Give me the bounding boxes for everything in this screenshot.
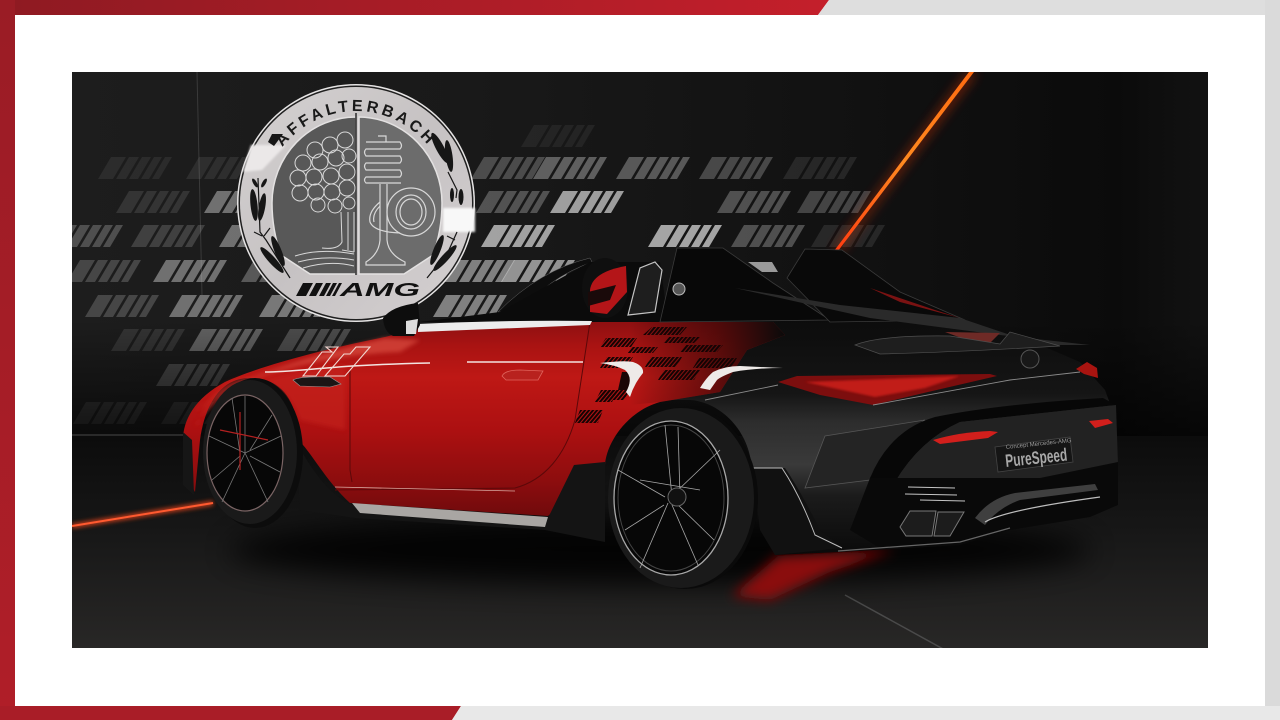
trunk lid highlight	[855, 332, 1060, 354]
star logo	[1021, 350, 1039, 368]
wall stripe graphics	[49, 125, 885, 424]
floor shadow under car	[230, 516, 1090, 584]
emblem disc	[237, 84, 475, 322]
roll hoop left	[660, 248, 830, 322]
laurel right	[427, 131, 464, 278]
plate small text: Concept Mercedes-AMG	[1006, 438, 1072, 451]
side vent badge	[293, 377, 341, 387]
floor lines	[72, 503, 945, 650]
rear wheel	[608, 407, 758, 589]
AMG logo: AMG	[338, 280, 420, 300]
car: rear black body	[674, 362, 1109, 555]
front wheel	[203, 378, 303, 528]
seat gap white	[748, 262, 778, 272]
wall floor junction	[72, 434, 183, 436]
front fascia dark edge	[183, 432, 194, 495]
photo: car in showroom	[72, 72, 1208, 648]
wall panel seams	[197, 72, 202, 295]
wing mirror	[383, 303, 420, 336]
car: red body	[183, 322, 785, 516]
showroom wall	[72, 72, 1208, 452]
laurel left	[249, 134, 290, 278]
character line	[265, 362, 583, 372]
windscreen frame	[498, 258, 592, 312]
seat	[628, 262, 662, 315]
helmet	[582, 258, 628, 318]
rear spokes	[618, 425, 720, 568]
medallion on hoop	[673, 283, 685, 295]
ring glare	[243, 145, 475, 232]
white chrome strip	[418, 321, 592, 332]
rear tyre	[612, 407, 758, 589]
bright hood highlight	[222, 335, 418, 394]
rear aero flick	[754, 468, 806, 554]
AMG emblem	[237, 84, 477, 322]
frame: grey right bar	[1265, 0, 1280, 720]
frame: grey bottom bar	[452, 706, 1280, 720]
rear fender dark flash	[618, 372, 630, 390]
bright fender tone	[206, 376, 344, 429]
rear rim	[614, 421, 728, 575]
rear fender dark fade	[630, 322, 785, 405]
tail light main	[778, 374, 997, 405]
reflectors	[933, 419, 1113, 444]
white swooshes	[600, 361, 783, 397]
door cut lines	[335, 322, 590, 491]
plate PureSpeed: PureSpeed	[1004, 445, 1068, 471]
deck red reflections	[870, 288, 1000, 343]
front brake red	[220, 412, 268, 470]
right tail light	[1076, 362, 1098, 378]
front side skirt	[427, 462, 605, 542]
diffuser	[850, 462, 1118, 548]
front tyre	[207, 378, 303, 528]
inner shield	[272, 113, 442, 275]
rear deck gloss	[735, 288, 1090, 345]
neon light line	[834, 72, 975, 251]
rear hub	[668, 488, 686, 506]
text: AFFALTERBACH: AFFALTERBACH	[278, 100, 432, 147]
red floor glow	[732, 550, 895, 600]
spring and valve	[364, 136, 435, 265]
number plate	[995, 437, 1073, 472]
front rim	[207, 395, 283, 511]
floor	[72, 436, 1208, 648]
tail light glow	[805, 376, 960, 397]
cockpit	[420, 262, 668, 322]
frame: grey top bar	[818, 0, 1280, 15]
frame: red left bar	[0, 0, 15, 720]
mirror highlight	[406, 319, 418, 334]
front spokes	[209, 396, 281, 502]
wall lower shade	[72, 336, 1208, 436]
race number graphic	[303, 347, 370, 376]
silver sill	[352, 503, 548, 527]
roll hoop right	[787, 249, 965, 322]
tree	[290, 132, 356, 268]
AMG logo	[296, 283, 419, 296]
frame: red top bar	[0, 0, 829, 15]
body line under tail	[705, 372, 1080, 405]
frame: red bottom bar	[0, 706, 461, 720]
door handle	[502, 370, 543, 380]
rear lower dark panel	[805, 398, 1118, 488]
exhaust tips	[900, 511, 964, 536]
rear fender stripes	[575, 327, 737, 423]
rear bumper edge line	[838, 528, 1010, 551]
